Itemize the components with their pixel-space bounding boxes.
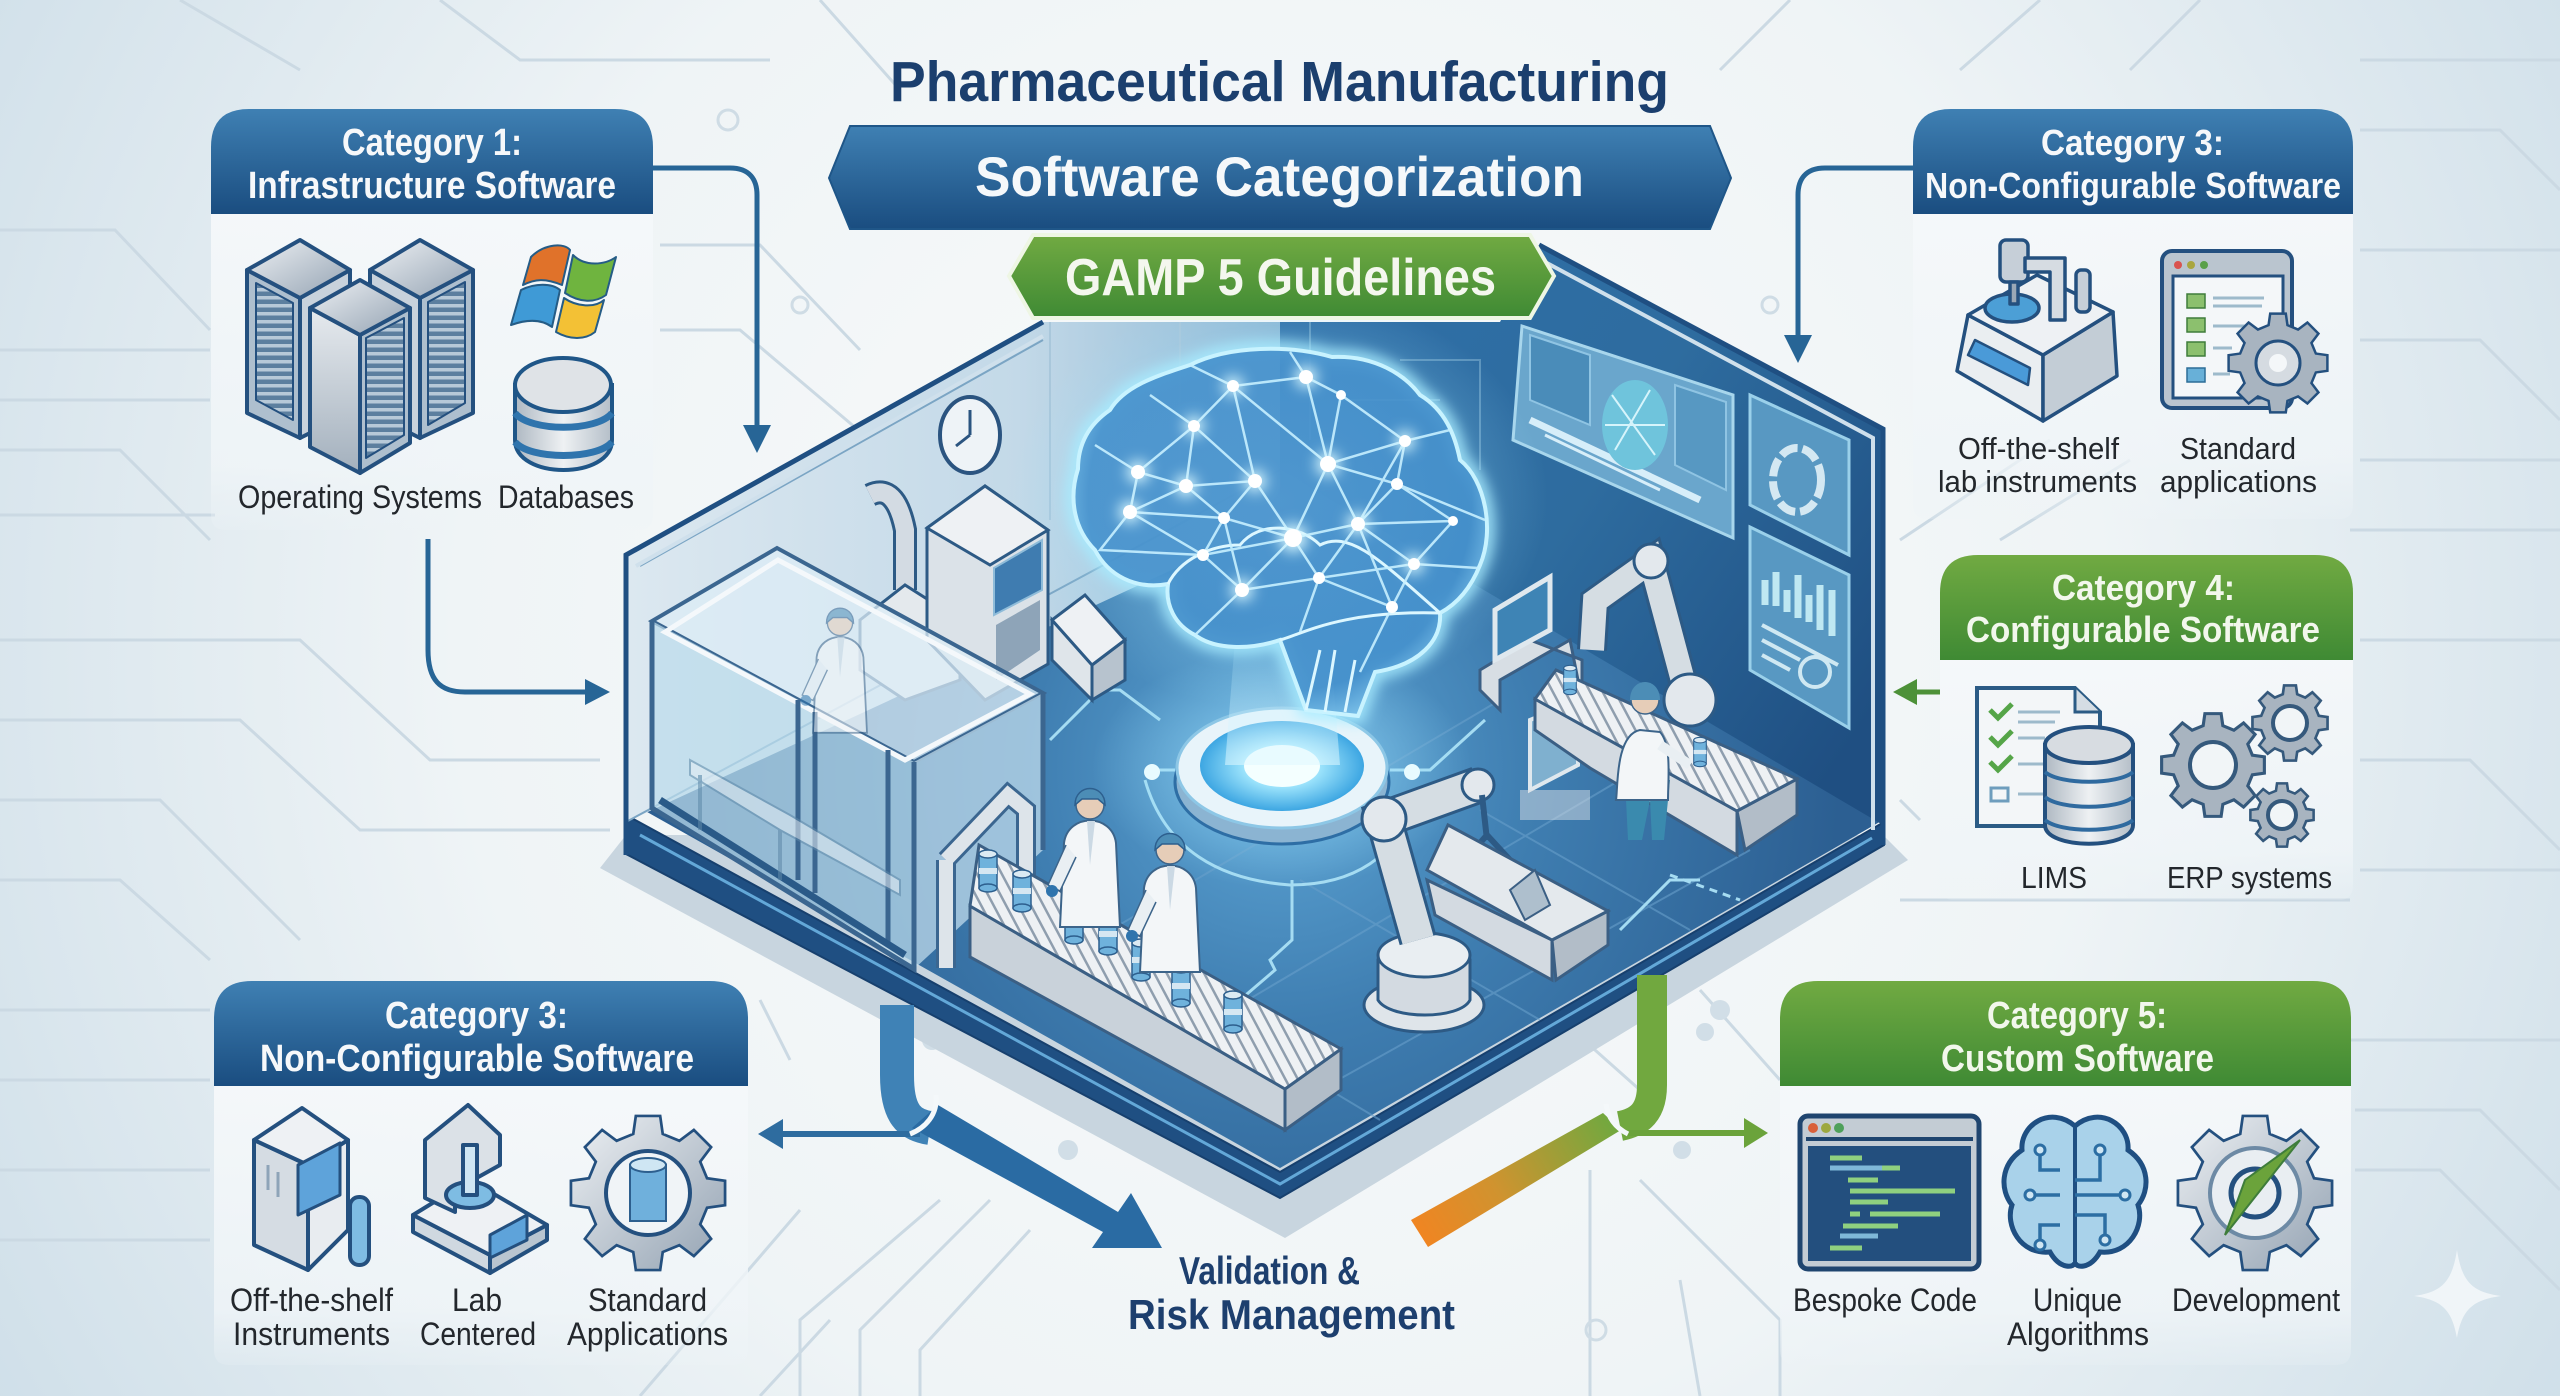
light beams — [1225, 640, 1340, 765]
icon: gear with bottle — [571, 1116, 725, 1270]
icon: application window with gear — [2162, 251, 2327, 412]
right conveyor — [1535, 665, 1797, 855]
main title: Pharmaceutical Manufacturing — [890, 50, 1669, 114]
clock — [940, 397, 1000, 473]
labels: Algorithms — [2007, 1316, 2149, 1352]
arrow: validation big diagonal — [910, 1095, 1162, 1248]
main conveyor — [970, 845, 1341, 1130]
labels: Centered — [420, 1316, 536, 1352]
control desk — [1480, 577, 1590, 820]
labels: LIMS — [2021, 860, 2087, 895]
labels: Bespoke Code — [1793, 1282, 1977, 1318]
caption: validation and risk management: Risk Management — [1128, 1291, 1455, 1338]
panel: category 3 bottom left — [214, 981, 748, 1365]
floor circuit traces — [1050, 690, 1740, 1040]
front robot arm — [1362, 769, 1510, 1032]
floor — [640, 470, 1883, 1168]
heading: category 5: Category 5: — [1987, 995, 2167, 1037]
heading: category 1 — [248, 122, 616, 207]
heading: category 3 — [260, 995, 694, 1080]
wall screen: gauge — [1750, 395, 1849, 555]
arrow: orange diagonal — [1411, 1104, 1628, 1247]
labels — [1793, 1282, 2340, 1352]
workers — [1046, 788, 1120, 927]
labels: Lab — [452, 1282, 502, 1318]
labels: Standard — [2180, 431, 2296, 466]
labels: applications — [2160, 464, 2317, 499]
wall outlines — [626, 245, 1883, 855]
icon: development gear — [2178, 1116, 2332, 1270]
middle conveyor — [1427, 825, 1608, 980]
panel: category 3 top right — [1913, 109, 2353, 519]
icon: server racks — [247, 240, 473, 473]
right robot arm — [1592, 544, 1716, 726]
labels: Standard — [588, 1282, 707, 1318]
right worker — [1616, 682, 1690, 840]
icon: lab centered instrument — [413, 1105, 547, 1273]
holographic brain — [1008, 290, 1548, 716]
icon: circuit brain — [2004, 1117, 2146, 1266]
labels: lab instruments — [1938, 464, 2137, 499]
labels: Instruments — [233, 1316, 390, 1352]
floor slab — [626, 815, 1884, 1198]
icon: ERP gears — [2162, 685, 2328, 847]
heading: category 5: Custom Software — [1941, 1038, 2214, 1080]
labels: Development — [2172, 1282, 2340, 1318]
labels: Databases — [498, 479, 634, 515]
panel: category 4 — [1940, 555, 2353, 900]
icon: database — [515, 358, 612, 470]
heading: category 1: Category 1: — [342, 122, 522, 164]
heading: category 4: Category 4: — [2052, 567, 2235, 608]
arrow: facility to category 3 bottom — [758, 1005, 930, 1149]
printer box — [1052, 595, 1125, 700]
wall screen: chart — [1750, 527, 1849, 728]
arrow: facility to category 5 — [1620, 975, 1768, 1148]
heading: category 3 — [1925, 122, 2341, 206]
icon: windows logo — [511, 245, 616, 338]
arrow: category 3 top right to facility — [1784, 168, 1913, 363]
heading: category 4 — [1966, 567, 2320, 650]
right wall — [1280, 245, 1883, 825]
icon: off-the-shelf instrument — [254, 1108, 369, 1270]
panel: category 5 — [1780, 981, 2351, 1365]
labels — [230, 1282, 728, 1352]
labels — [1938, 431, 2317, 499]
heading: category 1: Infrastructure Software — [248, 165, 616, 207]
banner: GAMP 5 guidelines — [1009, 235, 1554, 318]
panel: category 1 — [211, 109, 653, 530]
banner: software categorization: Software Categorization — [975, 145, 1584, 208]
caption: validation and risk management: Validation & — [1179, 1250, 1360, 1293]
arrow: category 4 to facility — [1893, 679, 1940, 705]
heading: category 4: Configurable Software — [1966, 609, 2320, 650]
watermark star — [2414, 1250, 2501, 1338]
control cabinet and pipe — [860, 486, 1048, 700]
heading: category 3: Non-Configurable Software — [1925, 165, 2341, 206]
heading: category 3: Non-Configurable Software — [260, 1038, 694, 1080]
clean room glass enclosure — [652, 548, 1043, 969]
labels: Operating Systems — [238, 479, 482, 515]
left wall — [626, 322, 1280, 822]
arrow: operating systems to facility — [428, 539, 610, 705]
heading: category 3: Category 3: — [385, 995, 568, 1037]
caption: validation and risk management — [1128, 1250, 1455, 1338]
labels: Off-the-shelf — [1958, 431, 2119, 466]
icon: LIMS document and database — [1977, 688, 2133, 844]
arrow: category 1 to facility — [653, 168, 757, 440]
heading: category 3: Category 3: — [2041, 122, 2224, 163]
banner: GAMP 5 guidelines: GAMP 5 Guidelines — [1065, 249, 1496, 307]
labels — [2021, 860, 2332, 895]
heading: category 5 — [1941, 995, 2214, 1080]
labels: Off-the-shelf — [230, 1282, 393, 1318]
icon: code window — [1800, 1116, 1979, 1269]
icon: lab instrument — [1957, 240, 2117, 421]
labels: Unique — [2033, 1282, 2122, 1318]
glowing pad — [1092, 648, 1472, 888]
banner: software categorization — [829, 126, 1731, 229]
wall screen: main dashboard — [1513, 326, 1733, 538]
pass-through gate — [946, 795, 1026, 968]
labels: ERP systems — [2167, 860, 2332, 895]
labels — [238, 479, 634, 515]
isometric pharmaceutical facility illustration — [600, 245, 1908, 1238]
labels: Applications — [567, 1316, 728, 1352]
